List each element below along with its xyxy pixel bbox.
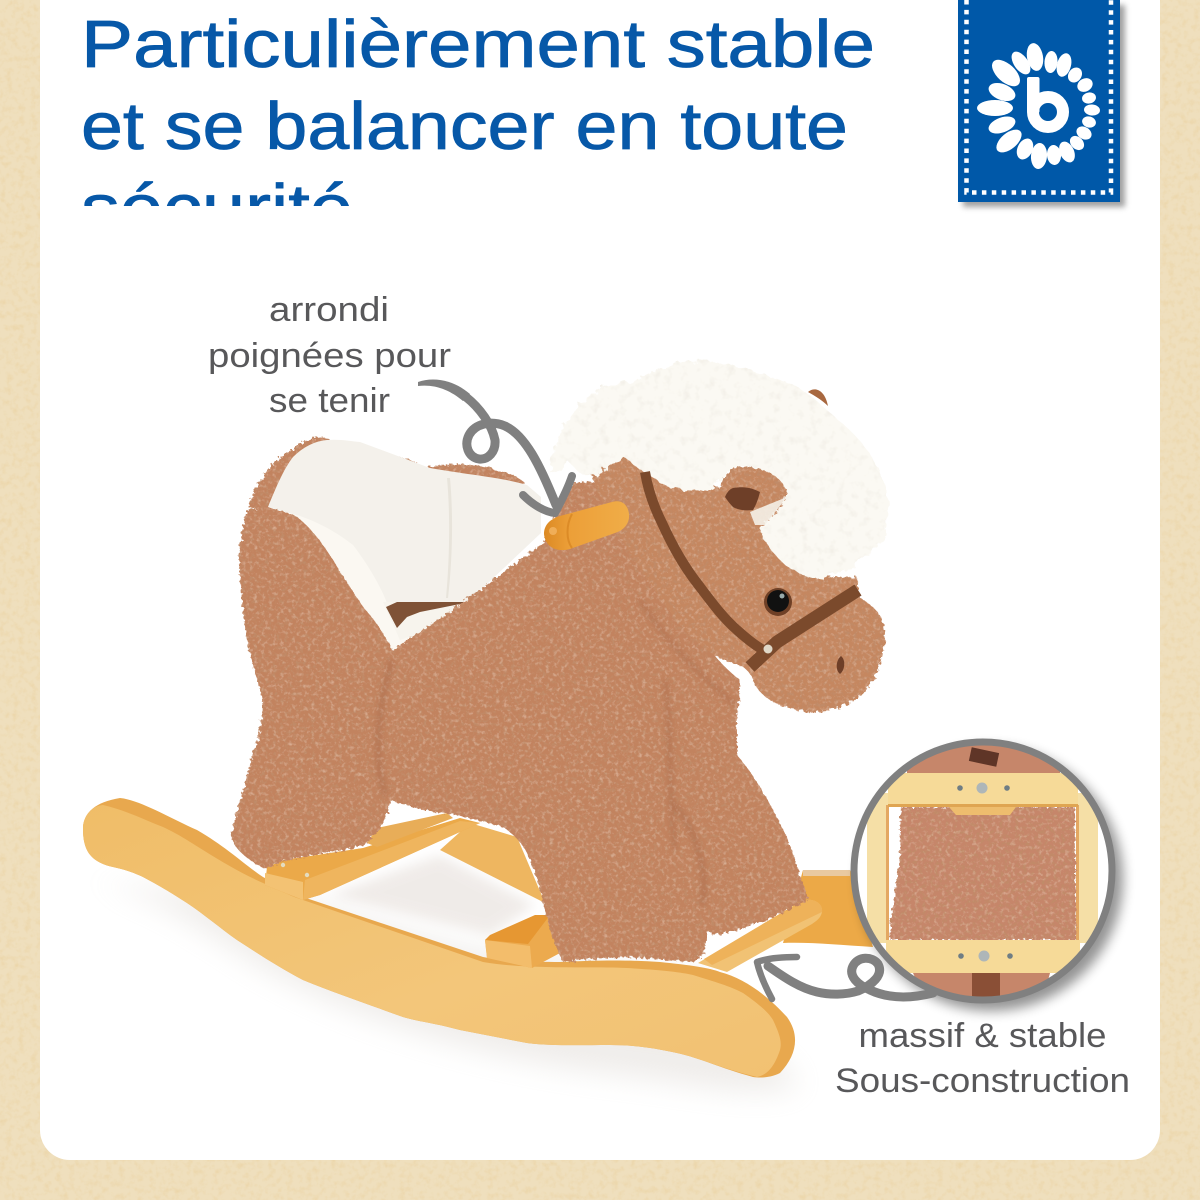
title: sécurité <box>81 171 353 246</box>
title: et se balancer en toute <box>81 89 848 164</box>
rocking horse product photo <box>70 361 888 1091</box>
ear back tip <box>808 389 828 406</box>
white mane <box>550 361 888 578</box>
arrow to handle <box>418 379 572 513</box>
seat cushion <box>268 440 541 655</box>
front bar <box>698 900 822 972</box>
flower petals <box>977 42 1100 170</box>
halter <box>645 472 858 667</box>
label: underside: massif & stable <box>858 1017 1106 1055</box>
label: handles: arrondi <box>269 291 389 329</box>
arrow to base <box>757 957 933 999</box>
label: underside <box>835 1017 1130 1100</box>
far rocker <box>440 823 873 947</box>
front block <box>485 913 560 968</box>
ear <box>717 467 787 527</box>
fur creases <box>378 600 735 905</box>
rear block and bar <box>265 818 480 900</box>
label: handles: se tenir <box>269 382 390 420</box>
label: handles: poignées pour <box>208 337 451 375</box>
letter b <box>1027 77 1063 127</box>
floor shadow <box>70 880 800 1091</box>
eye <box>764 588 792 616</box>
underside photo <box>867 740 1098 1010</box>
label: handles <box>208 291 451 420</box>
inset detail circle <box>853 740 1123 1011</box>
cross bars <box>265 813 822 972</box>
near rocker <box>83 798 795 1078</box>
horse body <box>232 480 807 962</box>
title: Particulièrement stable <box>81 7 875 82</box>
nostril <box>837 656 844 674</box>
seat back fur <box>248 437 525 520</box>
label: underside: Sous-construction <box>835 1062 1130 1100</box>
handle <box>544 501 629 550</box>
brand logo tag <box>958 0 1125 207</box>
saddle strap <box>386 602 470 628</box>
title <box>84 17 872 206</box>
horse head <box>590 457 885 712</box>
